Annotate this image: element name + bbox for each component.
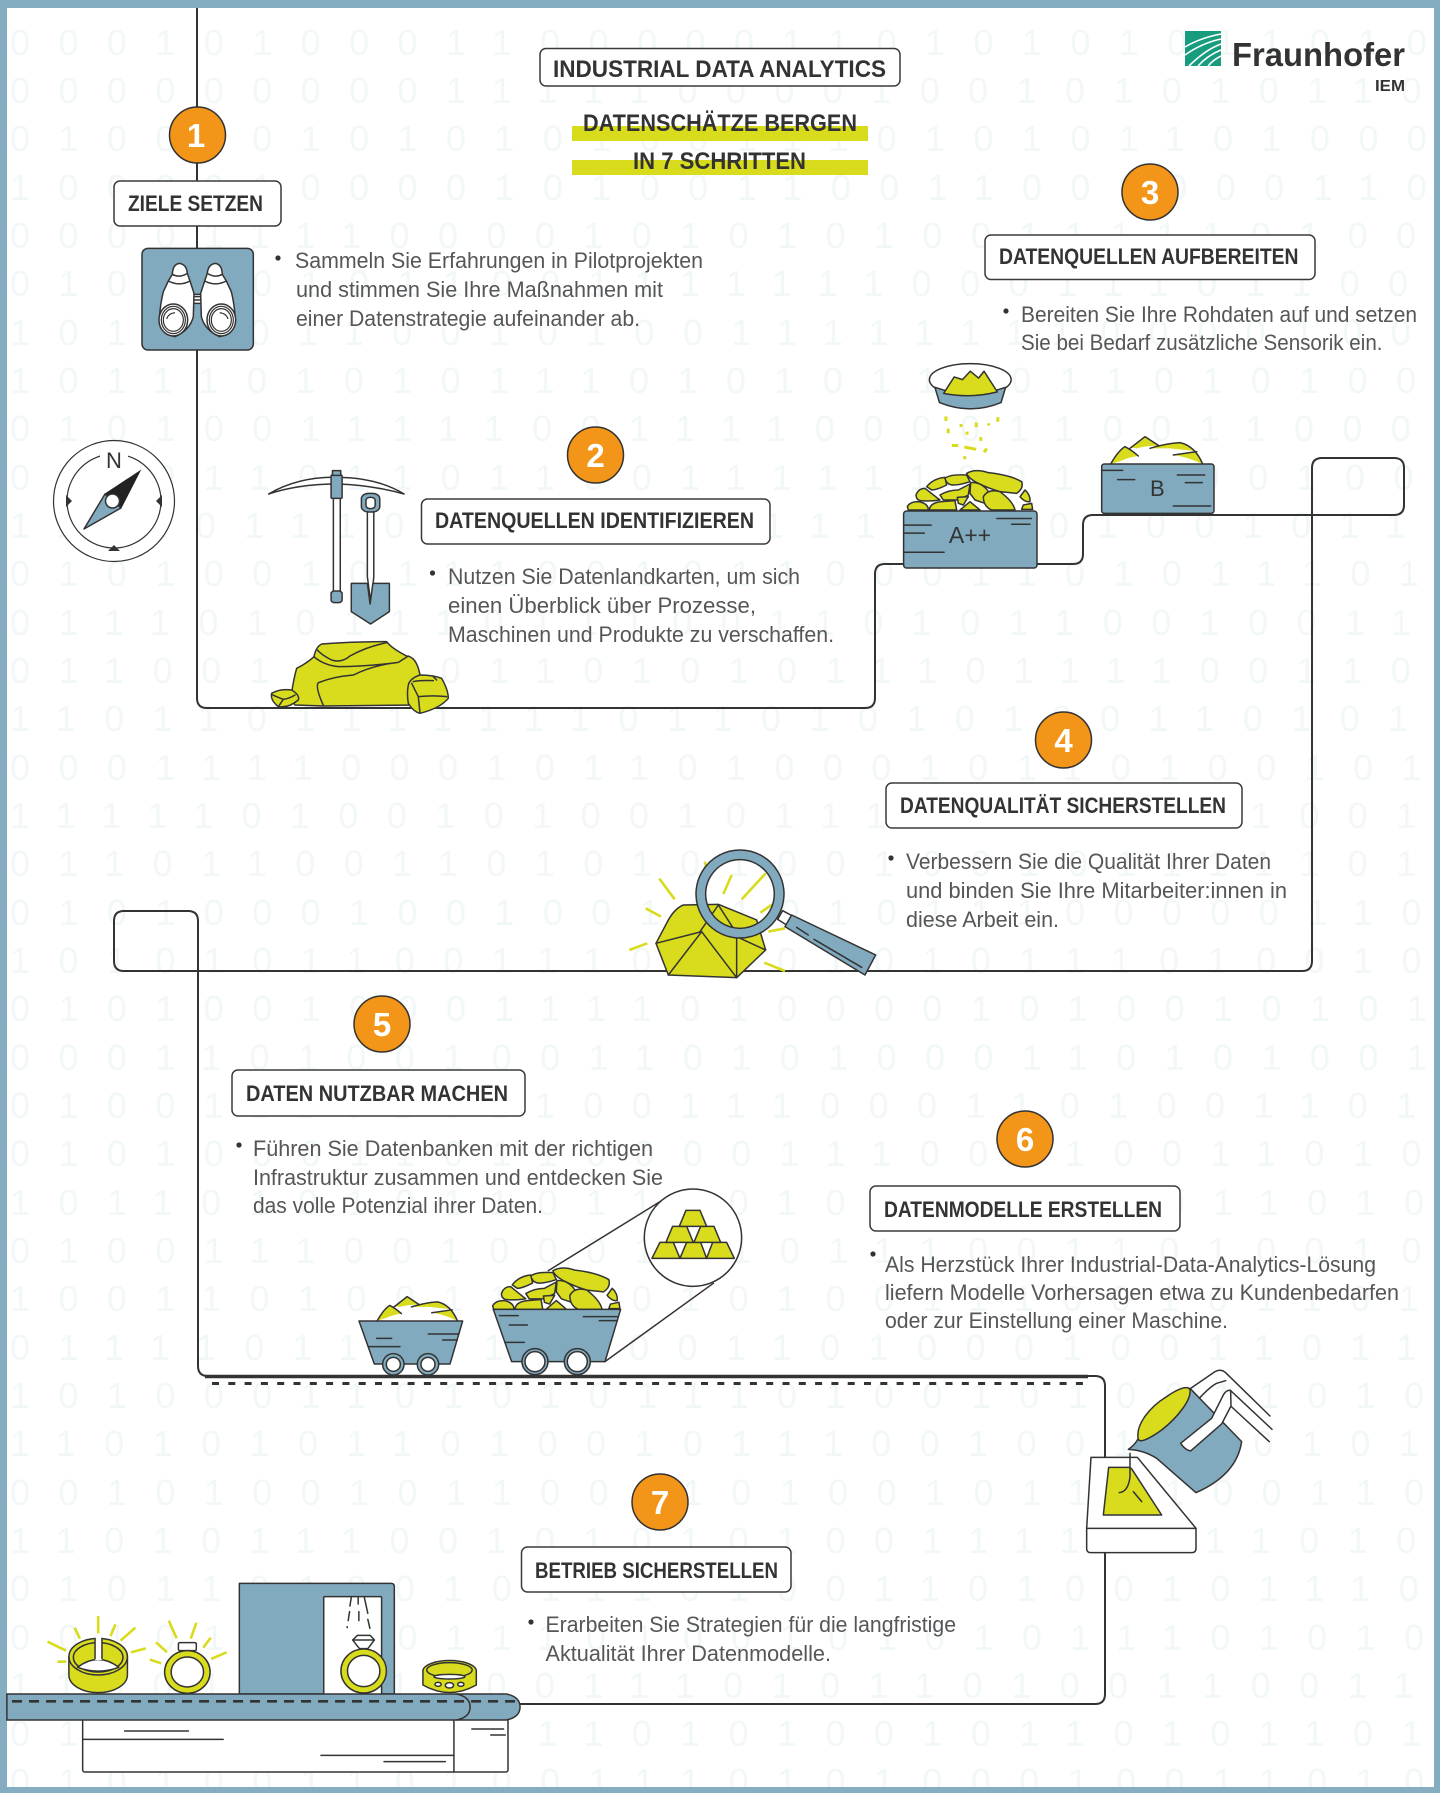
step 2 heading: DATENQUELLEN IDENTIFIZIEREN	[435, 508, 754, 533]
binary digit background: 000011110000101010100111110100	[10, 215, 1440, 256]
step 7 text: Aktualität Ihrer Datenmodelle.	[546, 1641, 831, 1666]
binary digit background: 010100101110010110001101011101	[10, 553, 1440, 594]
step 3 number: 3	[1141, 174, 1159, 211]
step 7 text: Erarbeiten Sie Strategien für die langfristige	[546, 1612, 956, 1637]
Fraunhofer logo	[1185, 31, 1405, 95]
step 3 heading	[985, 235, 1315, 280]
panel: step 2	[269, 427, 834, 713]
binary digit background: 110010111000111010110100110011	[10, 1665, 1440, 1706]
title box	[540, 48, 900, 86]
step 4 text: diese Arbeit ein.	[906, 907, 1059, 932]
panel: step 1	[114, 107, 703, 350]
step 1 number: 1	[187, 117, 205, 154]
subtitle line one: DATENSCHÄTZE BERGEN	[583, 110, 857, 137]
step 5 text: Infrastruktur zusammen und entdecken Sie	[253, 1165, 663, 1190]
conveyor belt	[7, 1694, 520, 1720]
step 3 text: Bereiten Sie Ihre Rohdaten auf und setzen	[1021, 302, 1417, 327]
binary digit background: 000101000110000011010101011010	[10, 22, 1440, 63]
step 4 heading: DATENQUALITÄT SICHERSTELLEN	[900, 793, 1226, 818]
step 2 number: 2	[586, 437, 605, 474]
step 6 heading: DATENMODELLE ERSTELLEN	[884, 1197, 1162, 1222]
binary digit background: 011101011101110011010110010011	[10, 602, 1439, 643]
step 6 heading	[870, 1186, 1180, 1231]
zoom lines	[548, 1201, 713, 1362]
conveyor line with rings	[7, 1583, 520, 1772]
binary digit background: 110101011010010111001001110101	[10, 1423, 1440, 1464]
icon: crucible pouring into mold	[1087, 1370, 1272, 1553]
step 6 number: 6	[1016, 1121, 1034, 1158]
step 5 number: 5	[373, 1006, 391, 1043]
zoom circle with gold bars	[644, 1189, 742, 1286]
step 1 text: und stimmen Sie Ihre Maßnahmen mit	[296, 277, 663, 302]
binary digit background: 101010110011100101010111010010	[10, 940, 1440, 981]
binary digit background: 010011100100010101110011010010	[10, 1230, 1440, 1271]
binary digit background: 011101000101101010010110101101	[10, 1713, 1440, 1754]
step 5 number	[354, 996, 410, 1052]
icon: gold rock	[271, 642, 448, 713]
binary digit background: 100001000010100110011000000110	[10, 167, 1440, 208]
icon: ore crate B	[1102, 437, 1214, 513]
rail under the carts	[205, 1376, 1089, 1384]
binary digit background: 011110110010100110100010011011	[10, 1327, 1440, 1368]
step 6 text: Als Herzstück Ihrer Industrial-Data-Analytics-Lösung	[885, 1252, 1376, 1277]
binary digit background: 010010101100111111100011101100	[10, 263, 1437, 304]
binary digit background: 010100011011000011100010011010	[10, 1133, 1440, 1174]
binary digit background: 111110100101001011100110101001	[10, 795, 1440, 836]
binary digit background: 010100100011110100001010010101	[10, 988, 1440, 1029]
binary digit background: 000111100010110100010110100101	[10, 747, 1440, 788]
step 7 heading	[522, 1547, 791, 1592]
processing machine	[239, 1583, 394, 1697]
ring four	[423, 1661, 476, 1692]
step 5 text	[236, 1136, 663, 1218]
step 3 number	[1122, 164, 1178, 220]
step 6 text: liefern Modelle Vorhersagen etwa zu Kundenbedarfen	[885, 1280, 1399, 1305]
icon: pickaxe and shovel	[269, 471, 404, 624]
binary digit background: 010100111110011110000110011000	[10, 408, 1439, 449]
panel: step 5	[232, 996, 742, 1375]
binary digit background: 111101110011100111100101001011	[10, 505, 1434, 546]
icon: sieve pan with falling nuggets	[929, 364, 1011, 459]
icon: gem under magnifying glass	[629, 850, 876, 978]
binary digit background: 010000101010100111010101101000	[10, 118, 1440, 159]
binary digit background: 010011101011001110001101001101	[10, 1085, 1440, 1126]
binary digit background: 011001101011010101110111100110	[10, 650, 1439, 691]
panel: step 6	[870, 1111, 1399, 1553]
binary digit background: 101101010110110010101000011010	[10, 1182, 1440, 1223]
step 1 number	[170, 107, 226, 163]
step 2 text	[430, 564, 834, 647]
step 5 heading: DATEN NUTZBAR MACHEN	[246, 1081, 508, 1106]
icon: ore crate A++	[904, 471, 1037, 568]
highlight bar two	[572, 160, 868, 175]
highlight bar one	[572, 126, 868, 141]
step 1 heading	[114, 181, 281, 226]
step 4 number	[1036, 712, 1092, 768]
step 4 text: Verbessern Sie die Qualität Ihrer Daten	[906, 849, 1271, 874]
binary digit background: 001010010111010010101011101010	[10, 1617, 1440, 1658]
icon: compass: N	[106, 448, 122, 473]
binary digit background: 110110111111101101010100110101	[10, 698, 1437, 739]
title text: INDUSTRIAL DATA ANALYTICS	[553, 56, 886, 83]
binary digit background: 110101110010101010011110011010	[10, 1520, 1440, 1561]
step 3 heading: DATENQUELLEN AUFBEREITEN	[999, 244, 1298, 269]
step 7 heading: BETRIEB SICHERSTELLEN	[535, 1558, 778, 1583]
icon: binoculars	[142, 248, 253, 350]
step 7 number	[632, 1474, 688, 1530]
icon: ore crate A++: A++	[949, 522, 991, 548]
binary digit background: 101100110010100111111110000100	[10, 312, 1439, 353]
logo IEM: IEM	[1375, 78, 1405, 95]
step 4 heading	[886, 783, 1242, 828]
step 3 text	[1003, 302, 1417, 355]
step 1 heading: ZIELE SETZEN	[128, 191, 263, 216]
binary digit background: 001010010110011010010110100110	[10, 1472, 1440, 1513]
step 5 text: das volle Potenzial ihrer Daten.	[253, 1193, 543, 1218]
binary digit background: 000110100100110101000110101001	[10, 1037, 1440, 1078]
step 7 number: 7	[651, 1484, 669, 1521]
step 4 text: und binden Sie Ihre Mitarbeiter:innen in	[906, 878, 1287, 903]
step 1 text	[275, 248, 703, 331]
small mine cart	[359, 1297, 463, 1375]
binary digit background: 010100010010011101011100000110	[10, 892, 1440, 933]
panel: step 3	[904, 164, 1417, 568]
logo mark	[1185, 31, 1221, 66]
binary digit background: 101000110101011101001010011010	[10, 1375, 1440, 1416]
ring one	[48, 1616, 146, 1693]
subtitle line two: IN 7 SCHRITTEN	[633, 148, 806, 175]
step 2 text: Nutzen Sie Datenlandkarten, um sich	[448, 564, 800, 589]
binary digit background: 101110101011101010111011010100	[10, 360, 1440, 401]
step 6 number	[997, 1111, 1053, 1167]
large mine cart	[493, 1268, 621, 1375]
binary digit background: 010110100101110100110100101110	[10, 1568, 1440, 1609]
step 2 text: Maschinen und Produkte zu verschaffen.	[448, 622, 834, 647]
title	[540, 48, 900, 175]
step 3 text: Sie bei Bedarf zusätzliche Sensorik ein.	[1021, 330, 1382, 355]
step 6 text	[870, 1251, 1399, 1333]
step 2 heading	[422, 499, 770, 544]
step 6 text: oder zur Einstellung einer Maschine.	[885, 1308, 1228, 1333]
step 5 heading	[232, 1070, 525, 1116]
ring three	[341, 1635, 386, 1693]
ring two	[150, 1621, 227, 1693]
step 2 number	[568, 427, 624, 483]
panel: step 7	[7, 1474, 956, 1772]
icon: mine carts with gold bars	[359, 1189, 742, 1375]
panel: step 4	[629, 712, 1287, 978]
step 1 text: Sammeln Sie Erfahrungen in Pilotprojekten	[295, 248, 703, 273]
step 4 text	[888, 849, 1287, 932]
icon: compass	[54, 440, 174, 562]
step 7 text	[528, 1612, 956, 1666]
step 2 text: einen Überblick über Prozesse,	[448, 593, 756, 618]
binary digit background: 000011011011001111110010100100	[10, 457, 1440, 498]
icon: ore crate B: B	[1150, 476, 1165, 501]
binary digit background: 000000000111110000100101010110	[10, 70, 1440, 111]
step 1 text: einer Datenstrategie aufeinander ab.	[296, 306, 640, 331]
logo wordmark: Fraunhofer	[1232, 36, 1405, 73]
step 5 text: Führen Sie Datenbanken mit der richtigen	[253, 1136, 653, 1161]
step 4 number: 4	[1054, 722, 1073, 759]
binary digit background: 100110100111001010011100101101	[10, 1278, 1440, 1319]
binary digit background: 011011001101010100100101111101	[10, 843, 1440, 884]
cabinet under conveyor	[83, 1717, 508, 1772]
